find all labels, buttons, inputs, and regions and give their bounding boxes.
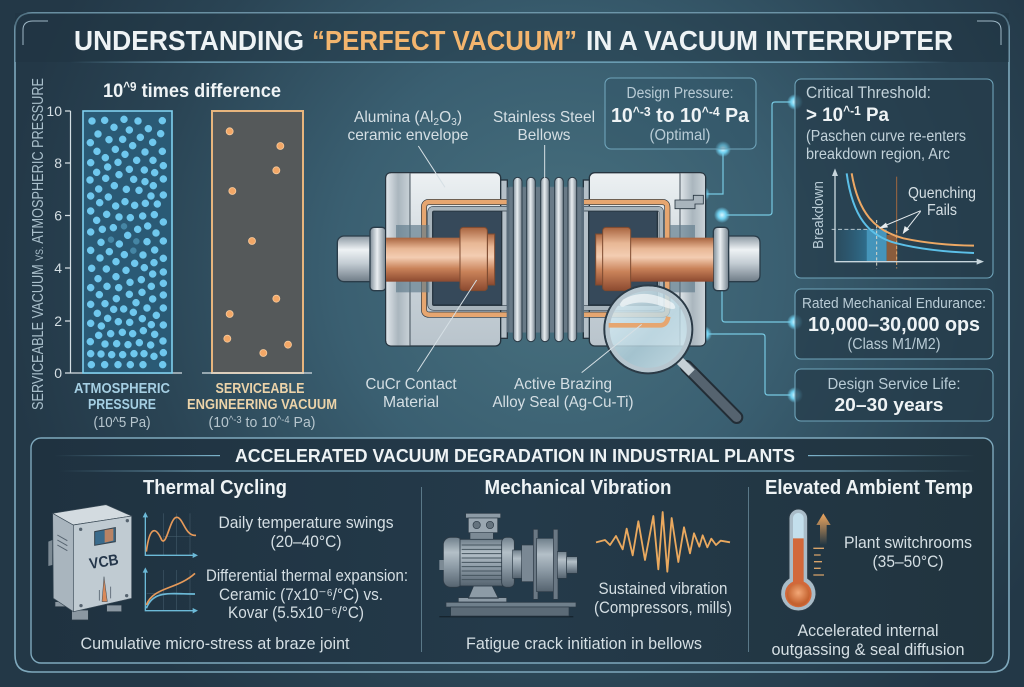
y axis: 0 (54, 365, 62, 381)
y axis: 8 (54, 155, 62, 171)
y axis title: SERVICEABLE VACUUM VS. ATMOSPHERIC PRESSURE (30, 78, 47, 410)
panel: design pressure: (Optimal) (650, 127, 710, 144)
callout: CuCr contact material (366, 376, 457, 411)
callout: alumina ceramic envelope: 2 (433, 116, 439, 128)
label: serviceable engineering vacuum: SERVICEABLE (216, 381, 305, 397)
left ceramic body (386, 173, 507, 346)
chart annotation (908, 185, 976, 219)
chart heading: ^9 (123, 80, 137, 94)
label: atmospheric pressure (74, 381, 170, 431)
title: IN A VACUUM INTERRUPTER (586, 25, 953, 56)
callout: stainless steel bellows: Stainless Steel (493, 109, 595, 126)
panel: critical threshold: Pa (861, 104, 889, 126)
text: temperature swings: (20–40°C) (270, 533, 342, 551)
panel: critical threshold: ^-1 (843, 104, 861, 118)
callout: CuCr contact material: Material (383, 394, 439, 411)
callout: active brazing alloy seal (492, 376, 634, 411)
y axis: 4 (54, 260, 62, 276)
title: “PERFECT VACUUM” (312, 25, 577, 56)
y axis: 10 (46, 103, 62, 119)
title (74, 25, 953, 56)
label: serviceable engineering vacuum: ^-4 (277, 415, 290, 426)
chart: thermal expansion (143, 567, 198, 613)
panel: rated mechanical endurance (795, 289, 993, 359)
callout: alumina ceramic envelope: 3 (451, 116, 457, 128)
callout: active brazing alloy seal: Active Brazing (514, 376, 612, 393)
panel: design pressure: Pa (720, 105, 750, 127)
column: elevated ambient temp (765, 476, 973, 659)
label: serviceable engineering vacuum: Pa) (290, 414, 316, 431)
callout: alumina ceramic envelope (348, 109, 469, 144)
text: differential expansion: Differential thermal expansion: (206, 567, 408, 585)
panel: design service life: 20–30 years (834, 394, 944, 415)
panel: critical threshold: > 10 (806, 104, 844, 126)
panel: design service life: Design Service Life: (828, 376, 960, 393)
panel: design pressure: ^-3 (633, 105, 651, 119)
section heading: ACCELERATED VACUUM DEGRADATION IN INDUSTRIAL PLANTS (235, 446, 795, 466)
text: plant switchrooms (844, 534, 972, 571)
column: mechanical vibration (439, 476, 732, 653)
label: serviceable engineering vacuum: ^-3 (229, 415, 242, 426)
text: outgassing (772, 621, 964, 659)
label: serviceable engineering vacuum: (10 (208, 414, 230, 431)
panel: design pressure: to 10 (651, 105, 702, 127)
left shaft end (337, 227, 760, 291)
callout: stainless steel bellows: Bellows (518, 127, 570, 144)
right ceramic body (583, 173, 706, 346)
text: sustained vibration: (Compressors, mills) (594, 599, 732, 617)
icon: motor (439, 513, 577, 617)
vacuum interrupter diagram (337, 145, 760, 417)
text: sustained vibration: Sustained vibration (598, 580, 728, 598)
panel: rated mechanical endurance: 10,000–30,000 ops (808, 314, 980, 336)
callout: CuCr contact material: CuCr Contact (366, 376, 457, 393)
label: atmospheric pressure: ATMOSPHERIC (74, 381, 170, 397)
panel: design service life (795, 369, 993, 421)
text: differential expansion: Kovar (5.5x10⁻⁶/°C) (228, 604, 364, 622)
title: UNDERSTANDING (74, 25, 304, 56)
column: thermal cycling (48, 476, 408, 653)
text: outgassing: Accelerated internal (798, 621, 938, 640)
bar: atmospheric pressure (83, 111, 172, 373)
column: elevated ambient temp: Elevated Ambient Temp (765, 476, 973, 499)
chart annotation: Quenching (908, 185, 976, 202)
bar: serviceable vacuum (202, 111, 312, 373)
chart heading: 10 (103, 80, 125, 102)
panel: design pressure: 10 (611, 105, 633, 127)
callout: alumina ceramic envelope: ) (457, 109, 462, 126)
y axis (46, 103, 182, 381)
callout: stainless steel bellows (493, 109, 595, 144)
right copper contact (596, 227, 713, 291)
callout: alumina ceramic envelope: O (439, 109, 451, 126)
panel: pressure comparison chart (30, 78, 337, 431)
callout: alumina ceramic envelope: ceramic envelope (348, 127, 469, 144)
text: outgassing: outgassing & seal diffusion (772, 640, 964, 659)
panel: critical threshold: Critical Threshold: (806, 83, 931, 102)
panel: critical threshold (795, 79, 993, 278)
column: thermal cycling: Thermal Cycling (143, 476, 287, 499)
panel: design pressure: ^-4 (702, 105, 720, 119)
text: plant switchrooms: Plant switchrooms (844, 534, 972, 552)
leader lines (417, 145, 642, 373)
panel: rated mechanical endurance: (Class M1/M2) (848, 336, 940, 353)
left copper contact (386, 227, 495, 291)
text: differential expansion (206, 567, 408, 622)
chart annotation: Fails (927, 202, 957, 219)
label: atmospheric pressure: PRESSURE (88, 397, 156, 413)
text: temperature swings: Daily temperature swings (218, 514, 394, 532)
text: temperature swings (218, 514, 394, 551)
chart: Paschen curve (832, 168, 984, 268)
panel: rated mechanical endurance: Rated Mechanical Endurance: (802, 295, 986, 312)
label: serviceable engineering vacuum: ENGINEERING VACUUM (187, 397, 337, 413)
bellows (507, 177, 584, 342)
text: micro-stress: Cumulative micro-stress at braze joint (80, 634, 350, 653)
text: sustained vibration (594, 580, 732, 617)
text: plant switchrooms: (35–50°C) (872, 553, 944, 571)
icon: VCB cabinet (48, 505, 132, 620)
panel: design pressure: Design Pressure: (626, 85, 734, 102)
icon: magnifying glass (604, 285, 737, 417)
panel: critical threshold: breakdown region, Arc (806, 146, 950, 163)
text: fatigue crack: Fatigue crack initiation in bellows (466, 634, 702, 653)
panel: design pressure (605, 78, 756, 149)
text: differential expansion: Ceramic (7x10⁻⁶/°C) vs. (219, 586, 383, 604)
label: atmospheric pressure: (10^5 Pa) (94, 414, 150, 431)
panel: critical threshold: (Paschen curve re-enters (806, 128, 966, 145)
column: mechanical vibration: Mechanical Vibration (484, 476, 672, 499)
callout: active brazing alloy seal: Alloy Seal (Ag-Cu-Ti) (492, 394, 634, 411)
y axis: 2 (54, 313, 62, 329)
chart heading: times difference (137, 80, 281, 102)
chart: vibration waveform (596, 512, 730, 572)
connector lines (694, 94, 803, 403)
chart: temperature swing (143, 512, 198, 558)
panel: accelerated vacuum degradation (31, 438, 993, 663)
icon: thermometer (781, 509, 831, 611)
icon: VCB cabinet: VCB (88, 552, 120, 573)
label: serviceable engineering vacuum (187, 381, 337, 431)
callout: alumina ceramic envelope: Alumina (Al (354, 109, 436, 126)
label: serviceable engineering vacuum: to 10 (242, 414, 277, 431)
chart axis label: Breakdown (811, 181, 827, 249)
y axis: 6 (54, 208, 62, 224)
